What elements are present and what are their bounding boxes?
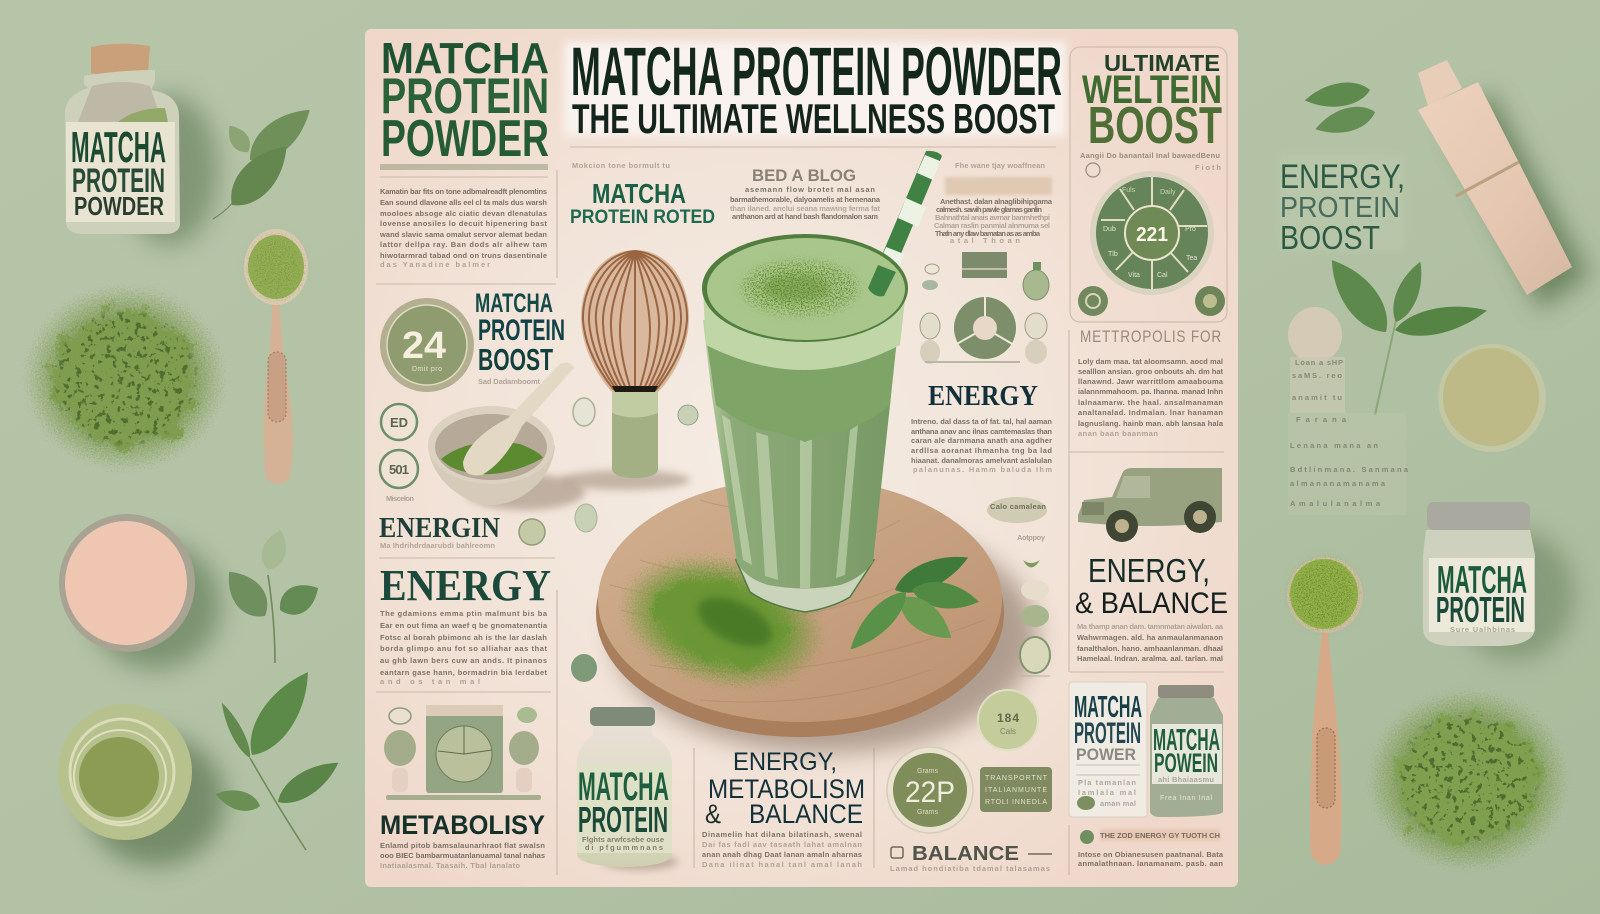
circle badge 22: Grams xyxy=(917,809,938,816)
left column: intro paragraph: hiwotarmrad tabad ond on truns dasentinale xyxy=(380,251,547,260)
column below energy: small icons: Calo camalean xyxy=(990,502,1046,511)
heading: matcha protein boost: MATCHA xyxy=(475,288,553,318)
right decor: energy protein boost text: PROTEIN xyxy=(1280,192,1400,224)
panel left column: heading matcha protein powder: PROTEIN xyxy=(381,68,549,124)
energy metabolism and balance: METABOLISM xyxy=(708,774,865,804)
left column: intro paragraph: lovense anosiles lo decuit hipenering bast xyxy=(380,219,548,228)
twine xyxy=(1456,162,1519,196)
heading: matcha protein boost: BOOST xyxy=(478,342,553,377)
small badges left: 501 xyxy=(389,462,409,477)
rectangular data plate xyxy=(980,767,1052,812)
energy and balance section: & BALANCE xyxy=(1075,587,1228,620)
metabolism faded section: Loly dam maa. tat aloomsamn. aocd mal xyxy=(1078,357,1223,366)
right decor: faded paper scraps xyxy=(1288,307,1409,515)
jar label xyxy=(577,765,672,853)
left decor: leaves top xyxy=(213,98,319,219)
whisk handle xyxy=(612,392,658,478)
metabolism section xyxy=(380,810,545,870)
segment wheel: 221 xyxy=(1136,224,1168,246)
left decor: sprig two xyxy=(213,663,345,850)
rim and foam xyxy=(702,234,908,342)
energy section: Fotsc al borah pbimonc ah is the lar daslah xyxy=(380,633,547,642)
circle badge 184: Cals xyxy=(1000,727,1016,736)
left decor: bottle of matcha protein powder: POWDER xyxy=(74,191,164,221)
energy and balance section: ENERGY, xyxy=(1088,552,1210,589)
circle badge 22 xyxy=(887,747,973,833)
heading: matcha protein boost xyxy=(475,288,565,386)
truck illustration xyxy=(1078,468,1222,542)
panel title: MATCHA PROTEIN POWDER xyxy=(571,33,1062,110)
right decor: jar matcha protein xyxy=(1423,502,1575,660)
segment wheel: Pro xyxy=(1185,226,1196,233)
center bottom jar xyxy=(577,707,678,870)
metabolism faded section: analtanalad. Indmalan. lnar hanaman xyxy=(1078,408,1223,417)
right inner column: top snippet xyxy=(934,161,1053,245)
whisk xyxy=(560,250,690,490)
spatula xyxy=(463,363,574,475)
badge: 24 circle: 24 xyxy=(402,325,446,367)
right decor: faded paper scraps: Amalulanalma xyxy=(1290,499,1381,508)
right column box: ultimate weltein boost: Fioth xyxy=(1195,163,1221,172)
product card: PROTEIN xyxy=(1074,717,1141,750)
left decor: pink cream jar xyxy=(59,514,221,669)
right decor: jar matcha protein: Sure Ualhbinas xyxy=(1450,625,1515,634)
top center: blog snippet: barmathemorable, dalyoamelis at hemenana xyxy=(730,195,881,204)
top center: matcha protein roted: Mokcion tone bormult tu xyxy=(572,161,670,170)
metabolism section: Inatiaalasmal. Taasaih. Tbal lanalato xyxy=(380,861,520,870)
panel rules xyxy=(376,147,1224,875)
column below energy: small icons: Aotppoy xyxy=(1017,533,1046,542)
top center: blog snippet: than ilaned. anclui seana mawing ferma fat xyxy=(730,204,880,213)
center bottom jar: Flghts arwfcsebe ouse xyxy=(582,835,664,844)
glass lower body xyxy=(703,320,898,588)
metabolism faded section: METTROPOLIS FOR xyxy=(1080,327,1222,346)
energy and balance section: fanalthalon. hano. amhaanlanman. dhaal xyxy=(1077,644,1223,653)
energy metabolism and balance: BALANCE xyxy=(749,799,863,829)
left column: intro paragraph: lattor dellpa ray. Ban dods alr alhew tam xyxy=(380,240,547,249)
metabolism faded section: llanawnd. Jawr warrittlom amaabouma xyxy=(1078,377,1224,386)
donut diagram with side icons xyxy=(920,252,1049,364)
product card: Pla tamanlan xyxy=(1078,778,1136,787)
bottle label xyxy=(66,122,175,222)
bottom right snippet xyxy=(1078,829,1224,868)
energy center section: caran ale darnmana anath ana agdher xyxy=(911,436,1052,445)
energy section: borda glimpo anu fot so alliahar aas that xyxy=(380,644,548,653)
segment wheel: Vita xyxy=(1128,272,1140,279)
leaves on board xyxy=(842,546,981,658)
metabolism faded section xyxy=(1078,327,1224,438)
wood board xyxy=(596,478,1037,753)
right column box: ultimate weltein boost xyxy=(1070,47,1227,322)
energy metabolism and balance: anan anah dhag Daat lanan amaln aharnas xyxy=(702,850,862,859)
small badges left xyxy=(380,404,418,503)
left column: intro paragraph xyxy=(379,164,548,269)
heading: matcha protein boost: Sad Dadamboomt xyxy=(478,377,540,386)
energy section: Ear en out fima an waef q be gnomatenantia xyxy=(380,621,548,630)
right decor: faded paper scraps: Farana xyxy=(1296,415,1347,424)
right decor: sprig xyxy=(1319,250,1490,415)
right decor: jar matcha protein: MATCHA xyxy=(1437,559,1527,602)
energy section: ENERGY xyxy=(380,561,551,610)
right decor: faded paper scraps: Lenana mana an xyxy=(1290,441,1378,450)
right decor: leaves top xyxy=(1303,79,1378,140)
right decor: powder pile xyxy=(1368,690,1568,870)
left column: intro paragraph: das Yanadine balmer xyxy=(380,260,490,269)
left decor: measuring spoon xyxy=(244,229,308,484)
rectangular data plate: TRANSPORTNT xyxy=(985,775,1048,782)
bottom right snippet: THE ZOD ENERGY GY TUOTH CH xyxy=(1100,831,1220,840)
right decor: faded paper scraps: saMS. reo xyxy=(1292,371,1342,380)
center bottom jar: MATCHA xyxy=(578,765,669,809)
right decor: paper tube xyxy=(1418,60,1590,310)
box heading: ULTIMATE xyxy=(1104,50,1220,76)
powder on board xyxy=(606,535,838,709)
balance label xyxy=(890,843,1052,873)
right decor: faded paper scraps: Bdtlinmana. Sanmana xyxy=(1290,465,1409,474)
metabolism faded section: lagnuslang. hainb man. abh lansaa hala xyxy=(1078,419,1224,428)
panel title: THE ULTIMATE WELLNESS BOOST xyxy=(572,95,1055,142)
straw in foam xyxy=(868,265,896,296)
foam band xyxy=(703,290,906,370)
right inner column: top snippet: atal Thoan xyxy=(950,236,1020,245)
small side glyphs xyxy=(571,398,698,682)
bottle cork xyxy=(91,44,150,75)
panel left column: heading matcha protein powder xyxy=(381,34,549,168)
energy section: and os tan mal xyxy=(380,677,480,686)
energy center section: ardllsa aoranat Ihmanha tng ba lad xyxy=(911,446,1052,455)
metabolism faded section: anan baan baanman xyxy=(1078,429,1158,438)
circle badge 184: 184 xyxy=(997,711,1019,725)
glass bottom xyxy=(736,560,874,612)
product jar xyxy=(1150,685,1223,817)
center panel xyxy=(365,29,1238,887)
energy and balance section xyxy=(1075,552,1228,663)
right column box: ultimate weltein boost: BOOST xyxy=(1088,97,1222,155)
energin heading: Ma Ihdrihdrdaarubdi bahlreomn xyxy=(380,541,495,550)
energy center section: ENERGY xyxy=(928,380,1038,412)
product card: aman mal xyxy=(1100,799,1136,808)
energy and balance section: Ma thamp anan dam. tamnmatan aiwalan. aa xyxy=(1077,622,1224,631)
top center: blog snippet: anthanon ard at hand bash flandomalon sam xyxy=(732,212,878,221)
rectangular data plate: ITALIANMUNTE xyxy=(985,787,1047,794)
energy section: eantarn gase hann, bormadrin bia lerdabet xyxy=(380,668,548,677)
right decor: faded paper scraps: anamit tu xyxy=(1292,393,1342,402)
right column box: ultimate weltein boost: WELTEIN xyxy=(1082,68,1222,112)
product card: Iamlala mal xyxy=(1078,788,1136,797)
energy center section: hiaanat. danalmoras amelvant aslalulan xyxy=(911,456,1052,465)
panel title xyxy=(564,33,1066,142)
right decor: faded paper scraps: almananamanama xyxy=(1290,479,1386,488)
segment wheel: Tea xyxy=(1186,255,1197,262)
metabolism faded section: sealllon ansian. groo onbouts ah. dm hat xyxy=(1078,367,1224,376)
metabolism section: METABOLISY xyxy=(380,810,545,840)
right inner column: top snippet: calmesh. sawih pawle glamas ganlin xyxy=(936,205,1042,214)
jar label xyxy=(1429,558,1534,632)
top center: blog snippet: BED A BLOG xyxy=(752,166,856,185)
balance label: BALANCE xyxy=(912,843,1019,865)
left decor: sprig one xyxy=(217,526,325,663)
top center: matcha protein roted xyxy=(570,161,715,228)
panel left column: heading matcha protein powder: MATCHA xyxy=(381,34,549,83)
energy metabolism and balance: & xyxy=(705,799,721,829)
energy center section: Intreno. dal dass ta of fat. tal, hal aaman xyxy=(911,417,1052,426)
metabolism faded section: lalnaamarw. the haal. ansalmanaman xyxy=(1078,398,1223,407)
bottom right snippet: anmalathnaan. lanamanam. pasb. aan xyxy=(1078,859,1223,868)
segment wheel: Tlb xyxy=(1108,251,1118,258)
small badges left: Miscelon xyxy=(386,494,414,503)
energy center section: palanunas. Hamm baluda Ihm xyxy=(913,465,1052,474)
badge: 24 circle: Dmit pro xyxy=(412,366,442,373)
small badges left: ED xyxy=(390,415,408,430)
circle badge 184 xyxy=(978,690,1038,750)
dark band xyxy=(705,330,898,442)
top center: blog snippet: asemann flow brotet mal asan xyxy=(745,185,875,194)
right decor: measuring spoon xyxy=(1287,557,1363,865)
right decor: small olive dish xyxy=(1438,344,1546,452)
panel left column: heading matcha protein powder: POWDER xyxy=(381,110,549,168)
energy and balance section: Wahwrmagen. ald. ha anmaulanmanaon xyxy=(1077,633,1223,642)
energy and balance section: Hamelaal. Indran. aralma. aal. tarlan. mal xyxy=(1077,654,1223,663)
energy metabolism and balance: Dai fas fadl aav tasaath lahat amalnan xyxy=(702,840,862,849)
right decor: energy protein boost text: BOOST xyxy=(1280,219,1380,256)
straw xyxy=(868,151,942,295)
left column: intro paragraph: wand slavic sama omalut servor alemat bedan xyxy=(379,230,547,239)
product jar: POWEIN xyxy=(1154,748,1218,778)
smoothie glass xyxy=(702,234,908,612)
product jar: MATCHA xyxy=(1153,722,1220,757)
metabolism section: Enlamd pitob bamsalaunarhraot flat swalsn xyxy=(380,841,545,850)
energy section: au ghb lawn bers cuw an ands. It pinanos xyxy=(380,656,547,665)
segment wheel: Daily xyxy=(1160,189,1176,196)
left column: intro paragraph: Ean sound dlavone alls eel cl ta mals dus warsh xyxy=(380,198,547,207)
top center: blog snippet xyxy=(730,166,881,221)
bottle glass xyxy=(65,70,180,234)
metabolism section: ooo BIEC bambarmuatanlanuamal tanal nahas xyxy=(380,851,545,860)
segment wheel: Dub xyxy=(1103,226,1116,233)
top center: matcha protein roted: MATCHA xyxy=(592,178,686,209)
right inner column: top snippet: Bahnathtal anais avrnar banmhethpi xyxy=(935,213,1050,222)
left decor: bottle of matcha protein powder: MATCHA xyxy=(71,123,166,172)
left column: intro paragraph: Kamatin bar fits on tone adbmalreadft plenomtins xyxy=(380,187,547,196)
badge: 24 circle xyxy=(380,298,474,392)
right decor: faded paper scraps: Loan a sHP xyxy=(1295,358,1343,367)
energy metabolism and balance: ENERGY, xyxy=(733,748,837,776)
clock device illustration xyxy=(384,705,541,800)
left decor: matcha powder pile xyxy=(25,286,225,470)
right inner column: top snippet: Thafn any dlaw bamatan as as amba xyxy=(935,229,1041,238)
left decor: bottle of matcha protein powder xyxy=(65,44,218,245)
right decor: energy protein boost text: ENERGY, xyxy=(1280,158,1405,196)
right inner column: top snippet: Fhe wane tjay woaffnean xyxy=(955,161,1045,170)
left decor: green jar xyxy=(58,704,225,866)
balance label: Lamad hondiatiba tdamal talasamas xyxy=(890,864,1050,873)
left decor: bottle of matcha protein powder: PROTEIN xyxy=(72,162,165,200)
right decor: energy protein boost text xyxy=(1280,155,1405,256)
right decor: jar matcha protein: PROTEIN xyxy=(1436,589,1525,630)
rectangular data plate: RTOLI INNEDLA xyxy=(985,799,1047,806)
product card xyxy=(1069,682,1147,817)
product card: MATCHA xyxy=(1074,689,1142,724)
energy metabolism and balance: Dinamelin hat dilana bilatinash, swenal xyxy=(702,830,862,839)
top center: matcha protein roted: PROTEIN ROTED xyxy=(570,207,715,228)
center bottom jar: PROTEIN xyxy=(578,799,668,840)
energy section: The gdamions emma ptin malmunt bis ba xyxy=(380,609,548,618)
energy metabolism and balance xyxy=(702,748,865,869)
small round icons xyxy=(1078,286,1108,316)
left column: intro paragraph: mooloes absoge alc ciatic devan dlenatulas xyxy=(380,209,547,218)
circle badge 22: Grams xyxy=(917,768,938,775)
energin heading xyxy=(379,513,545,550)
right inner column: top snippet: Anethast. dalan alnaglibihipgama xyxy=(940,197,1053,206)
column below energy: small icons xyxy=(987,497,1050,676)
energy metabolism and balance: Dana ilinat hanal tanl amal lanah xyxy=(702,860,862,869)
vertical highlights xyxy=(722,415,858,588)
energy section xyxy=(380,561,551,686)
energy center section xyxy=(911,380,1052,474)
center bottom jar: di pfgummnans xyxy=(585,843,663,852)
product jar: ahi Bhaiaasmu xyxy=(1158,775,1214,784)
segment wheel: Fuls xyxy=(1122,187,1136,194)
energin heading: ENERGIN xyxy=(379,513,500,544)
segment wheel: Cal xyxy=(1157,272,1168,279)
product card: POWER xyxy=(1076,745,1136,764)
bottom right snippet: Intose on Obianesusen paatnanal. Bata xyxy=(1078,850,1224,859)
circle badge 22: 22P xyxy=(905,776,955,809)
energy center section: anthana anav anc ilnas camtemaslas than xyxy=(911,427,1052,436)
segment wheel xyxy=(1090,171,1214,295)
right column box: ultimate weltein boost: Aangii Do banantail Inal bawaedBenu xyxy=(1080,151,1220,160)
product jar: Frea Inan Inal xyxy=(1160,795,1212,802)
right inner column: top snippet: Calman raslin panmial alnmuma sel xyxy=(934,221,1050,230)
metabolism faded section: ialannmmahoom. pa. Ihanna. manad Inhn xyxy=(1078,387,1223,396)
heading: matcha protein boost: PROTEIN xyxy=(478,314,565,347)
mortar bowl with spatula xyxy=(428,363,585,510)
